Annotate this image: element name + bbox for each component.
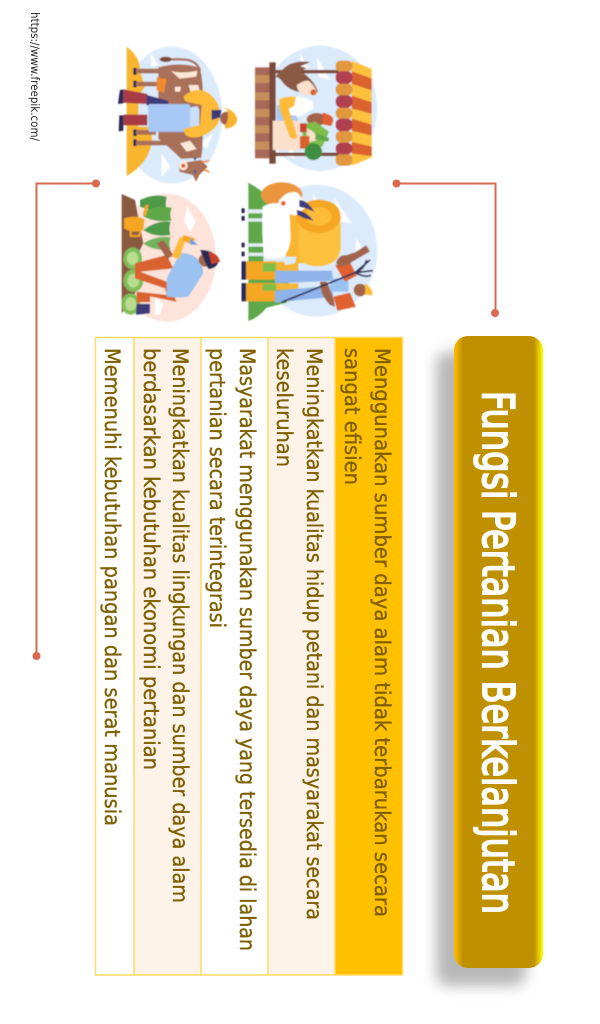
milk can xyxy=(148,104,199,132)
row 4: Meningkatkan kualitas lingkungan dan sumber daya alam xyxy=(167,348,192,903)
awning xyxy=(336,61,372,166)
row 4 xyxy=(134,337,201,975)
table of functions xyxy=(95,337,402,975)
source link text: https://www.freepik.com/ xyxy=(28,12,42,141)
row 1: Menggunakan sumber daya alam tidak terbarukan secara xyxy=(369,348,394,917)
row 1 xyxy=(335,337,402,975)
illustration: vegetable gardener xyxy=(117,194,220,322)
illustration: farmer with goat and hay xyxy=(242,182,377,321)
gardener xyxy=(135,235,220,315)
row 3: pertanian secara terintegrasi xyxy=(204,348,229,628)
farmer legs xyxy=(118,89,168,131)
row 3: Masyarakat menggunakan sumber daya yang tersedia di lahan xyxy=(234,348,259,951)
farmer upper body xyxy=(183,90,237,137)
row 1: sangat efisien xyxy=(339,348,364,485)
row 2: keseluruhan xyxy=(271,348,296,467)
connector line: right xyxy=(392,180,499,317)
chicken xyxy=(275,62,318,95)
farmer xyxy=(242,245,373,311)
leafy greens xyxy=(140,196,172,250)
illustration: market stall xyxy=(255,46,377,171)
watering can xyxy=(124,204,149,236)
hay xyxy=(127,47,152,176)
title banner xyxy=(436,336,543,986)
cow xyxy=(133,57,209,182)
illustration: farmer milking cow xyxy=(118,46,237,184)
cabbages xyxy=(121,247,143,315)
vendor xyxy=(279,96,333,139)
row 3 xyxy=(201,337,268,975)
row 5: Memenuhi kebutuhan pangan dan serat manusia xyxy=(99,348,124,826)
row 2 xyxy=(268,337,335,975)
row 5 xyxy=(95,337,134,975)
connector line: left xyxy=(32,180,100,660)
row 4: berdasarkan kebutuhan ekonomi pertanian xyxy=(138,348,163,770)
illustrations group xyxy=(117,46,377,322)
green mound xyxy=(248,183,290,321)
vegetables xyxy=(300,122,329,160)
row 2: Meningkatkan kualitas hidup petani dan masyarakat secara xyxy=(301,348,326,920)
hay bales xyxy=(261,182,341,290)
goat xyxy=(242,192,314,265)
